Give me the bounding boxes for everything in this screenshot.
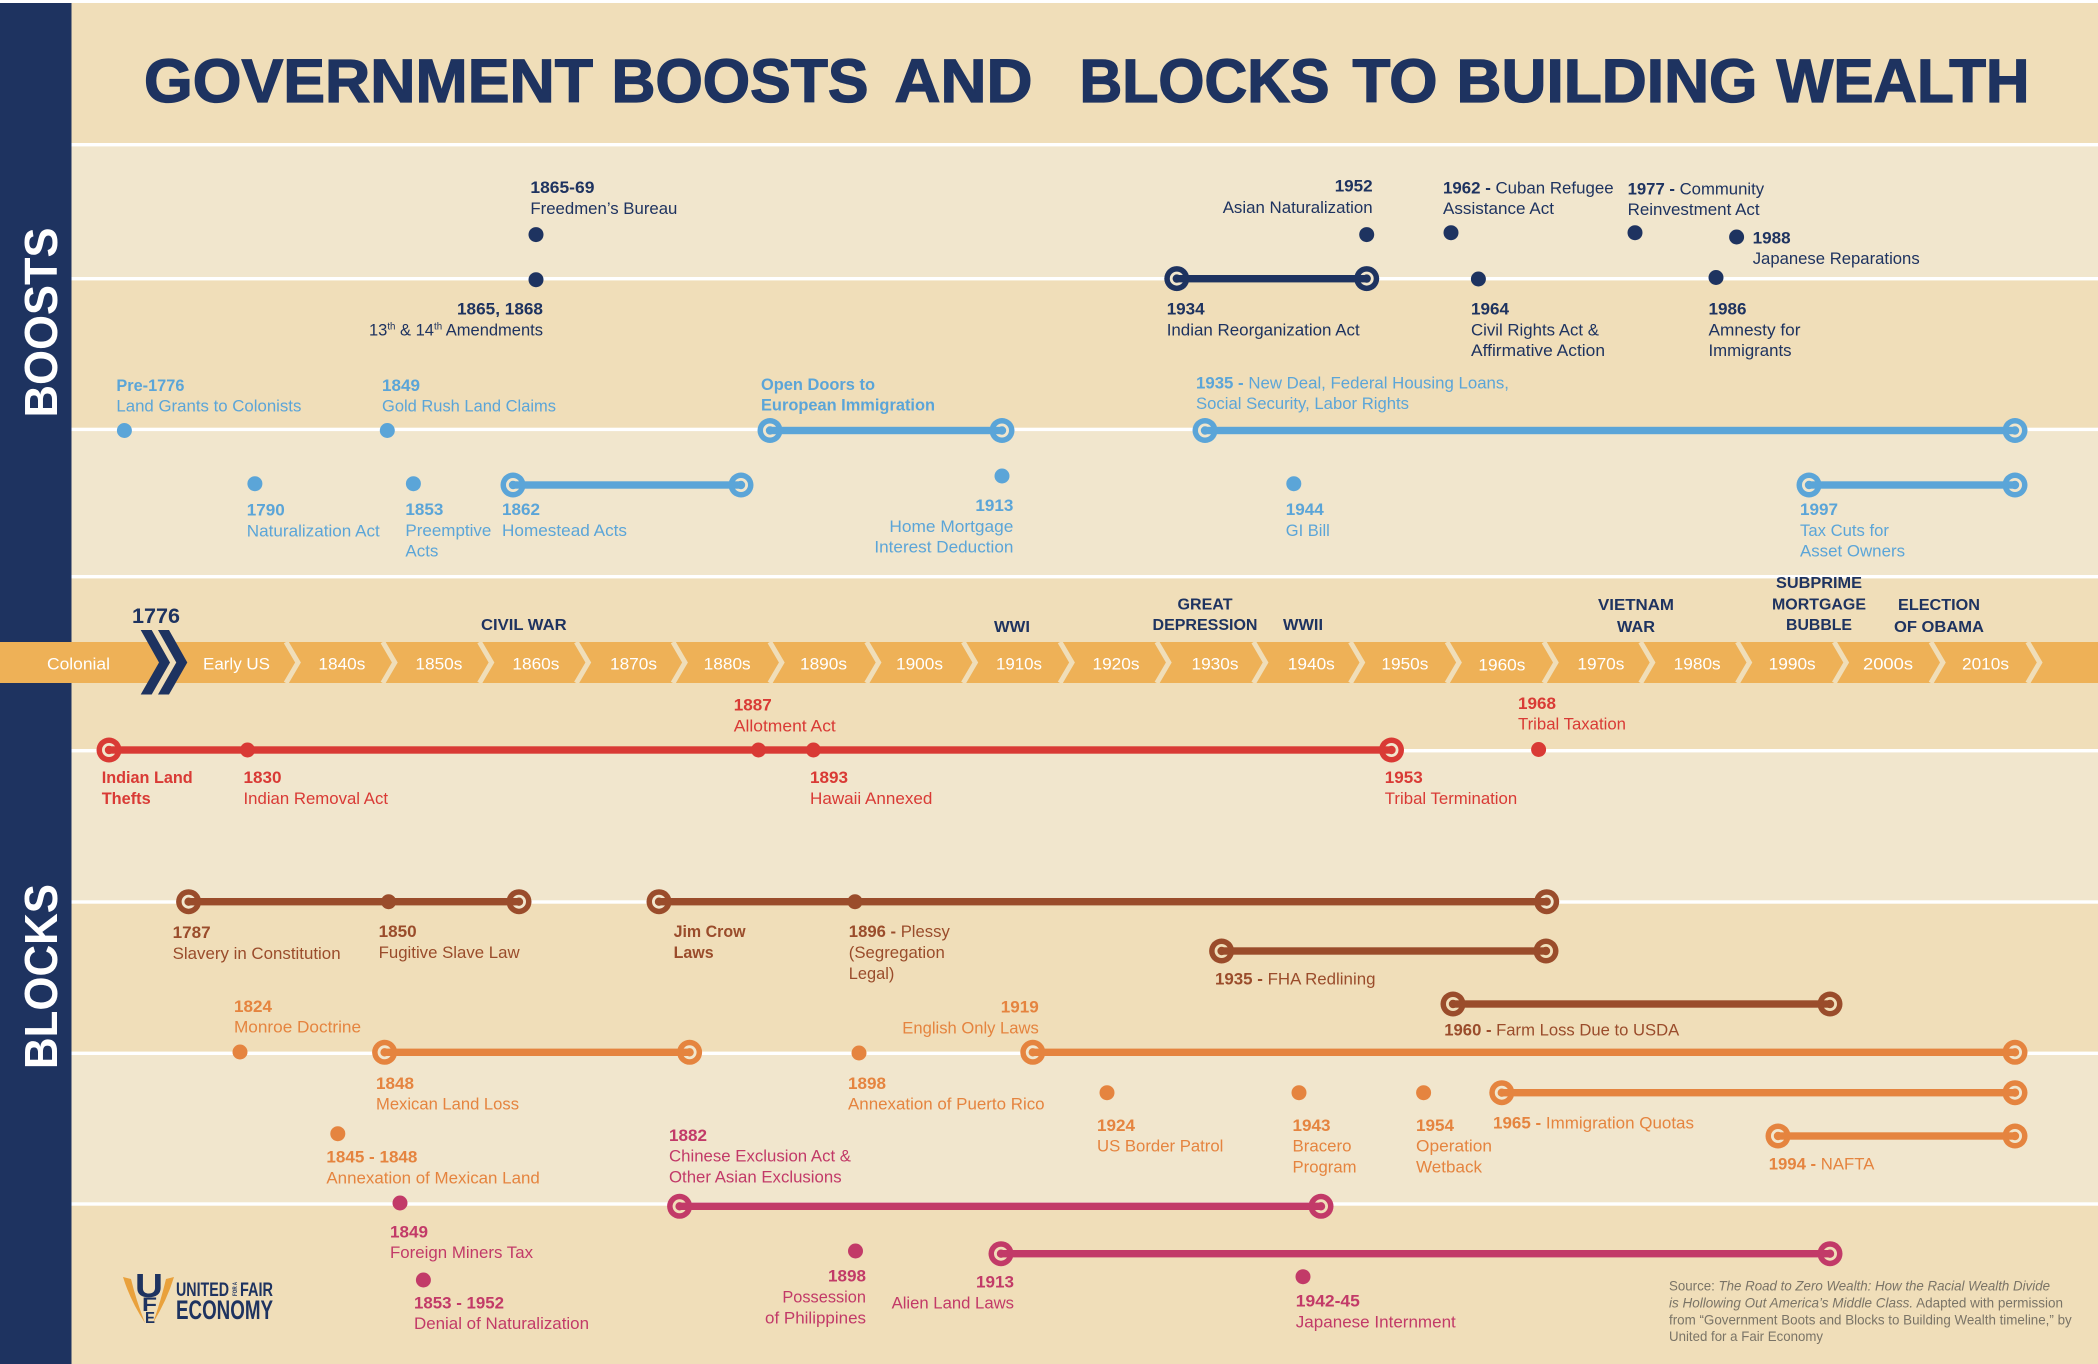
blocks row: orange events	[232, 997, 2028, 1187]
title	[144, 47, 2030, 115]
1943 Bracero Program: 1943	[1292, 1116, 1330, 1135]
1977 Community Reinvestment Act: 1977 - Community	[1628, 179, 1765, 198]
1845-1848 Annexation of Mexican Land: Annexation of Mexican Land	[326, 1168, 540, 1187]
1853 Preemptive Acts: 1853	[405, 500, 443, 519]
1830 Indian Removal Act: 1830	[244, 768, 282, 787]
1824 Monroe Doctrine: 1824	[234, 997, 273, 1016]
1887 Allotment Act: Allotment Act	[734, 716, 836, 735]
1964 Civil Rights Act: Affirmative Action	[1471, 341, 1605, 360]
1942-45 Japanese Internment: 1942-45	[1296, 1292, 1360, 1311]
1853-1952 Denial of Naturalization: Denial of Naturalization	[414, 1314, 589, 1333]
1997 Tax Cuts range: Tax Cuts for	[1800, 521, 1889, 540]
decade ribbon: 1890s	[800, 654, 847, 674]
1887 Allotment Act	[734, 696, 836, 758]
decade ribbon: 1940s	[1288, 654, 1335, 674]
1849 Gold Rush	[380, 376, 556, 438]
1850 Fugitive Slave Law: 1850	[379, 922, 417, 941]
1964 Civil Rights Act	[1471, 272, 1605, 360]
historical event labels: CIVIL WAR	[481, 617, 567, 634]
1962 Cuban Refugee Assistance Act	[1443, 179, 1614, 240]
1988 Japanese Reparations: 1988	[1753, 228, 1791, 247]
title: TO	[1352, 47, 1438, 115]
logo: United for a Fair Economy: ECONOMY	[176, 1295, 273, 1325]
source note: from “Government Boots and Blocks to Building Wealth timeline,” by	[1669, 1311, 2072, 1327]
1944 GI Bill	[1286, 476, 1330, 540]
1924 US Border Patrol: US Border Patrol	[1097, 1137, 1223, 1156]
1787 Slavery in Constitution range	[173, 889, 532, 963]
1968 Tribal Taxation: 1968	[1518, 694, 1556, 713]
1924 US Border Patrol	[1097, 1085, 1223, 1156]
1954 Operation Wetback: 1954	[1416, 1116, 1455, 1135]
Open Doors range: Open Doors to	[761, 375, 875, 394]
1935 FHA Redlining range: 1935 - FHA Redlining	[1215, 970, 1376, 989]
historical event labels: GREAT	[1178, 596, 1233, 613]
1848 Mexican Land Loss range: 1848	[376, 1074, 414, 1093]
1986 Amnesty for Immigrants: Immigrants	[1708, 341, 1792, 360]
source note: United for a Fair Economy	[1669, 1328, 1823, 1344]
boosts row: navy events	[369, 177, 1920, 360]
logo: United for a Fair Economy: FOR A	[233, 1282, 239, 1296]
1787 Slavery in Constitution range: 1787	[173, 923, 211, 942]
title: WEALTH	[1776, 47, 2030, 115]
decade ribbon: 1990s	[1769, 654, 1816, 674]
1898 Possession of Philippines	[765, 1244, 866, 1328]
1865, 1868 Amendments: 1865, 1868	[457, 300, 543, 319]
boosts row: light blue events	[116, 373, 2027, 560]
1865, 1868 Amendments	[369, 272, 544, 340]
logo: United for a Fair Economy: FAIR	[240, 1279, 273, 1301]
1865, 1868 Amendments: th	[387, 322, 395, 333]
1952 Asian Naturalization: Asian Naturalization	[1223, 198, 1373, 217]
sidebar heading: BLOCKS: BLOCKS	[15, 884, 67, 1069]
decade ribbon: 1950s	[1381, 654, 1428, 674]
1850 Fugitive Slave Law	[379, 894, 520, 962]
1935 New Deal range: 1935 - New Deal, Federal Housing Loans,	[1196, 373, 1509, 392]
1952 Asian Naturalization: 1952	[1335, 177, 1373, 196]
1986 Amnesty for Immigrants: 1986	[1708, 300, 1746, 319]
1896 Plessy: 1896 - Plessy	[849, 922, 950, 941]
1790 Naturalization Act: 1790	[247, 500, 285, 520]
1962 Cuban Refugee Assistance Act: 1962 - Cuban Refugee	[1443, 179, 1614, 198]
1849 Foreign Miners Tax: Foreign Miners Tax	[390, 1243, 533, 1262]
1849 Foreign Miners Tax	[390, 1196, 533, 1262]
sidebar	[0, 3, 72, 1364]
1893 Hawaii Annexed: Hawaii Annexed	[810, 789, 932, 808]
1824 Monroe Doctrine	[232, 997, 361, 1060]
Indian Land Thefts to 1953 range: Thefts	[102, 789, 151, 808]
decade ribbon: 1920s	[1092, 654, 1140, 674]
decade ribbon: 1910s	[996, 654, 1042, 674]
1845-1848 Annexation of Mexican Land	[326, 1126, 540, 1187]
1849 Gold Rush: 1849	[382, 376, 420, 395]
1968 Tribal Taxation	[1518, 694, 1626, 757]
1934 Indian Reorganization Act range: 1934	[1167, 300, 1205, 319]
historical event labels: WWII	[1283, 617, 1323, 634]
1898 Annexation of Puerto Rico	[848, 1046, 1045, 1114]
decade ribbon: 1870s	[610, 654, 657, 674]
1919 English Only Laws range: 1919	[1001, 998, 1039, 1017]
1848 Mexican Land Loss range: Mexican Land Loss	[376, 1095, 519, 1114]
1968 Tribal Taxation: Tribal Taxation	[1518, 715, 1626, 734]
1865-69 Freedmen's Bureau	[528, 178, 677, 242]
1898 Annexation of Puerto Rico: Annexation of Puerto Rico	[848, 1095, 1045, 1114]
blocks row: brown events	[173, 889, 1843, 1040]
Indian Land Thefts to 1953 range: Tribal Termination	[1385, 789, 1517, 808]
Indian Land Thefts to 1953 range	[96, 738, 1517, 808]
1865, 1868 Amendments: th	[434, 322, 442, 333]
1994 NAFTA range	[1766, 1124, 2028, 1173]
1934 Indian Reorganization Act range: Indian Reorganization Act	[1167, 321, 1360, 340]
1862 Homestead Acts range: 1862	[502, 500, 540, 519]
title: GOVERNMENT	[144, 47, 593, 115]
decade ribbon: 1860s	[512, 654, 559, 674]
decade ribbon: Colonial	[47, 654, 110, 674]
1896 Plessy	[848, 894, 950, 983]
1986 Amnesty for Immigrants: Amnesty for	[1708, 321, 1801, 340]
1898 Possession of Philippines: of Philippines	[765, 1309, 866, 1328]
1913 Home Mortgage Interest Deduction: Interest Deduction	[874, 538, 1013, 557]
logo: United for a Fair Economy: U	[135, 1267, 163, 1304]
1935 FHA Redlining range	[1209, 938, 1558, 989]
title: AND	[894, 47, 1032, 115]
icon: 1776 double chevron marker	[141, 630, 187, 694]
1943 Bracero Program	[1292, 1085, 1356, 1177]
1848 Mexican Land Loss range	[372, 1040, 702, 1114]
decade ribbon	[0, 642, 2098, 683]
1865, 1868 Amendments: Amendments	[442, 321, 543, 340]
1853-1952 Denial of Naturalization	[414, 1272, 589, 1333]
1960 Farm Loss range: 1960 - Farm Loss Due to USDA	[1444, 1021, 1680, 1040]
1986 Amnesty for Immigrants	[1708, 270, 1801, 360]
1898 Annexation of Puerto Rico: 1898	[848, 1074, 886, 1093]
1977 Community Reinvestment Act	[1628, 179, 1765, 240]
1960 Farm Loss range	[1440, 992, 1842, 1040]
1924 US Border Patrol: 1924	[1097, 1116, 1136, 1135]
Open Doors range	[758, 375, 1014, 443]
1913 Home Mortgage Interest Deduction	[874, 468, 1013, 557]
historical event labels: BUBBLE	[1786, 617, 1852, 634]
label: 1776: 1776	[132, 605, 180, 628]
1913 Alien Land Laws range: Alien Land Laws	[892, 1293, 1014, 1312]
logo: United for a Fair Economy: E	[145, 1310, 155, 1327]
blocks row: pink events	[390, 1126, 1842, 1333]
1942-45 Japanese Internment	[1296, 1269, 1456, 1331]
1853 Preemptive Acts	[405, 476, 491, 560]
1787 Slavery in Constitution range: Slavery in Constitution	[173, 944, 341, 963]
title: BUILDING	[1456, 47, 1758, 115]
1862 Homestead Acts range: Homestead Acts	[502, 521, 627, 540]
1913 Home Mortgage Interest Deduction: Home Mortgage	[889, 517, 1013, 536]
source note: is Hollowing Out America’s Middle Class. Adapted with permission	[1669, 1295, 2063, 1311]
decade ribbon: 2010s	[1962, 654, 2009, 674]
decade ribbon: 2000s	[1863, 654, 1913, 674]
1964 Civil Rights Act: 1964	[1471, 300, 1510, 319]
1865, 1868 Amendments: & 14	[395, 321, 434, 340]
1849 Foreign Miners Tax: 1849	[390, 1222, 428, 1241]
decade ribbon: 1960s	[1478, 656, 1525, 674]
decade ribbon: 1930s	[1192, 654, 1238, 674]
source note: Source: The Road to Zero Wealth: How the Racial Wealth Divide	[1669, 1278, 2050, 1294]
1790 Naturalization Act: Naturalization Act	[247, 522, 380, 540]
logo: United for a Fair Economy	[123, 1267, 273, 1327]
decade ribbon: Early US	[203, 654, 270, 674]
1887 Allotment Act: 1887	[734, 696, 772, 715]
1853 Preemptive Acts: Preemptive	[405, 521, 491, 540]
decade ribbon: 1970s	[1577, 654, 1624, 674]
1935 New Deal range: Social Security, Labor Rights	[1196, 394, 1409, 413]
sidebar heading: BOOSTS: BOOSTS	[15, 228, 67, 418]
1997 Tax Cuts range: 1997	[1800, 500, 1838, 519]
1935 New Deal range	[1192, 373, 2028, 443]
1919 English Only Laws range: English Only Laws	[902, 1018, 1039, 1037]
1865, 1868 Amendments: 13	[369, 321, 388, 340]
1882 Chinese Exclusion Act range: Other Asian Exclusions	[669, 1167, 842, 1186]
1944 GI Bill: 1944	[1286, 500, 1324, 519]
1954 Operation Wetback: Operation	[1416, 1137, 1492, 1156]
1943 Bracero Program: Program	[1292, 1158, 1356, 1177]
1862 Homestead Acts range	[500, 472, 754, 540]
1865-69 Freedmen's Bureau: Freedmen’s Bureau	[530, 199, 677, 218]
1865-69 Freedmen's Bureau: 1865-69	[530, 178, 594, 197]
1934 Indian Reorganization Act range	[1164, 266, 1379, 340]
1824 Monroe Doctrine: Monroe Doctrine	[234, 1017, 361, 1036]
1893 Hawaii Annexed	[806, 742, 932, 808]
1962 Cuban Refugee Assistance Act: Assistance Act	[1443, 199, 1554, 218]
title: BLOCKS	[1080, 47, 1330, 115]
1882 Chinese Exclusion Act range	[667, 1126, 1334, 1219]
1849 Gold Rush: Gold Rush Land Claims	[382, 396, 556, 415]
1845-1848 Annexation of Mexican Land: 1845 - 1848	[326, 1148, 417, 1167]
1898 Possession of Philippines: 1898	[828, 1267, 866, 1286]
decade ribbon: 1840s	[318, 654, 365, 674]
decade ribbon: 1850s	[415, 654, 462, 674]
blocks row: red events	[96, 694, 1626, 808]
1944 GI Bill: GI Bill	[1286, 521, 1330, 540]
1988 Japanese Reparations: Japanese Reparations	[1753, 249, 1920, 268]
1853 Preemptive Acts: Acts	[405, 542, 438, 560]
1893 Hawaii Annexed: 1893	[810, 768, 848, 787]
1919 English Only Laws range	[902, 998, 2027, 1065]
1898 Possession of Philippines: Possession	[782, 1288, 866, 1307]
1943 Bracero Program: Bracero	[1292, 1137, 1352, 1156]
Jim Crow Laws range	[646, 889, 1559, 962]
1965 Immigration Quotas range	[1489, 1080, 2028, 1133]
historical event labels: WAR	[1617, 619, 1655, 636]
historical event labels: ELECTION	[1898, 597, 1980, 614]
Pre-1776 Land Grants: Pre-1776	[116, 376, 184, 395]
historical event labels: SUBPRIME	[1776, 575, 1862, 592]
1954 Operation Wetback: Wetback	[1416, 1158, 1482, 1177]
Pre-1776 Land Grants: Land Grants to Colonists	[116, 396, 301, 415]
1896 Plessy: Legal)	[849, 964, 894, 983]
1942-45 Japanese Internment: Japanese Internment	[1296, 1312, 1456, 1331]
1830 Indian Removal Act	[240, 742, 388, 808]
title: BOOSTS	[612, 47, 868, 115]
1952 Asian Naturalization	[1223, 177, 1374, 242]
1896 Plessy: (Segregation	[849, 943, 945, 962]
1988 Japanese Reparations	[1729, 228, 1920, 268]
source note	[1669, 1278, 2072, 1344]
historical event labels	[481, 575, 1984, 636]
1965 Immigration Quotas range: 1965 - Immigration Quotas	[1493, 1114, 1694, 1133]
Indian Land Thefts to 1953 range: 1953	[1385, 768, 1423, 787]
decade ribbon: 1900s	[896, 654, 943, 674]
1964 Civil Rights Act: Civil Rights Act &	[1471, 321, 1600, 340]
logo: United for a Fair Economy: F	[142, 1295, 157, 1316]
1954 Operation Wetback	[1416, 1085, 1492, 1177]
1994 NAFTA range: 1994 - NAFTA	[1769, 1154, 1875, 1173]
1913 Alien Land Laws range: 1913	[976, 1273, 1014, 1292]
decade ribbon: 1980s	[1674, 654, 1721, 674]
decade ribbon: 1880s	[704, 654, 751, 674]
1790 Naturalization Act	[247, 476, 380, 540]
1913 Alien Land Laws range	[892, 1241, 1842, 1312]
Jim Crow Laws range: Jim Crow	[674, 922, 746, 941]
1853-1952 Denial of Naturalization: 1853 - 1952	[414, 1293, 504, 1312]
historical event labels: DEPRESSION	[1152, 617, 1258, 634]
Jim Crow Laws range: Laws	[674, 943, 714, 962]
1850 Fugitive Slave Law: Fugitive Slave Law	[379, 943, 520, 962]
Pre-1776 Land Grants	[116, 376, 301, 438]
1997 Tax Cuts range: Asset Owners	[1800, 542, 1905, 560]
historical event labels: OF OBAMA	[1894, 619, 1984, 636]
logo: United for a Fair Economy: UNITED	[176, 1279, 229, 1301]
historical event labels: MORTGAGE	[1772, 596, 1866, 613]
1882 Chinese Exclusion Act range: 1882	[669, 1126, 707, 1145]
1830 Indian Removal Act: Indian Removal Act	[244, 789, 388, 808]
1882 Chinese Exclusion Act range: Chinese Exclusion Act &	[669, 1147, 852, 1166]
Open Doors range: European Immigration	[761, 396, 935, 415]
Indian Land Thefts to 1953 range: Indian Land	[102, 768, 193, 787]
1977 Community Reinvestment Act: Reinvestment Act	[1628, 200, 1760, 219]
1913 Home Mortgage Interest Deduction: 1913	[975, 496, 1013, 515]
historical event labels: VIETNAM	[1598, 597, 1674, 614]
1997 Tax Cuts range	[1796, 472, 2028, 560]
historical event labels: WWI	[994, 619, 1030, 636]
